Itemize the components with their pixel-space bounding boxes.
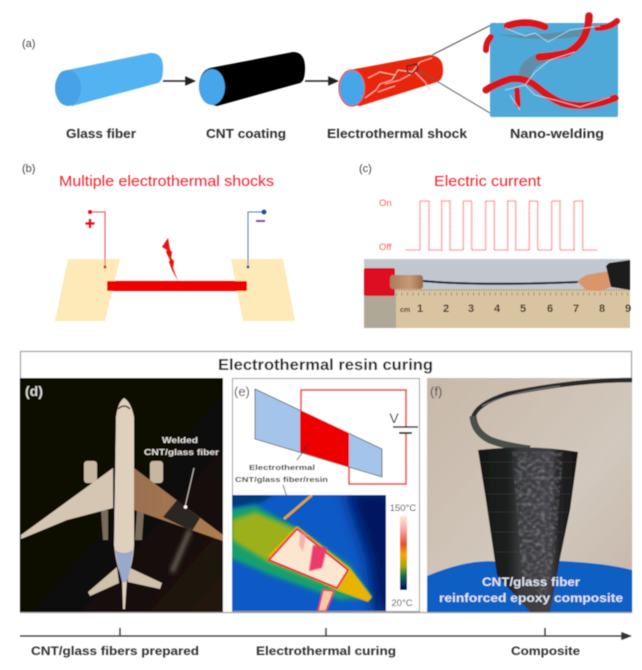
title c: Electric current	[434, 173, 542, 190]
label a: (a)	[22, 38, 35, 50]
welded fiber callout: CNT/glass fiber	[144, 447, 220, 457]
color bar maximum: 150°C	[390, 503, 416, 514]
section frame: electrothermal resin curing	[20, 352, 632, 615]
electrothermal shock cylinder	[339, 55, 443, 106]
ruler numbers: 1	[417, 303, 423, 315]
positive wire and sign	[86, 210, 106, 268]
timeline label 2: Electrothermal curing	[256, 646, 396, 658]
panel a: process schematic	[22, 16, 618, 141]
lightning icon	[162, 238, 178, 281]
ruler numbers: 9	[625, 303, 631, 315]
blue base	[427, 561, 632, 612]
panel d: airplane photo	[20, 378, 223, 612]
panel c: electric current and photo	[359, 163, 631, 328]
nano-welding detail	[486, 16, 618, 117]
timeline label 3: Composite	[511, 646, 580, 658]
welded fiber callout	[144, 435, 220, 509]
right electrode pad	[231, 259, 295, 321]
welded fiber callout: Welded	[162, 435, 198, 445]
ruler numbers: 7	[573, 303, 579, 315]
timeline	[20, 628, 630, 658]
ruler numbers: cm	[400, 307, 410, 314]
ruler numbers: 5	[520, 303, 526, 315]
pointer lines	[283, 443, 309, 536]
sheet label second line: CNT/glass fiber/resin	[235, 475, 329, 484]
composite caption line 2: reinforced epoxy composite	[439, 593, 623, 605]
label b: (b)	[22, 163, 35, 175]
off label: Off	[379, 242, 392, 253]
ruler numbers	[400, 303, 631, 315]
label e: (e)	[234, 384, 250, 399]
negative wire and sign	[246, 210, 266, 268]
ruler numbers: 4	[494, 303, 501, 315]
label c: (c)	[359, 163, 372, 175]
CNT coating label: CNT coating	[206, 127, 286, 141]
composite cone	[473, 380, 632, 612]
left electrode pad	[55, 259, 120, 321]
glass fiber cylinder	[55, 53, 163, 106]
timeline axis	[20, 633, 630, 639]
timeline ticks	[120, 628, 545, 636]
photo: wire with clips on ruler	[364, 259, 631, 328]
thermal image	[225, 488, 395, 615]
section heading: Electrothermal resin curing	[218, 357, 433, 374]
color bar minimum: 20°C	[391, 598, 413, 609]
nano-welding label: Nano-welding	[510, 127, 604, 141]
composite sheet circuit: V	[389, 410, 399, 426]
airplane	[21, 398, 223, 609]
composite sheet circuit	[255, 389, 418, 484]
pulse waveform	[406, 201, 597, 250]
panel b: electrothermal shock setup	[22, 163, 295, 321]
red sample bar	[107, 281, 247, 291]
glass fiber label: Glass fiber	[66, 127, 136, 141]
label f: (f)	[430, 384, 442, 399]
title b: Multiple electrothermal shocks	[59, 173, 274, 190]
sheet label: Electrothermal	[249, 463, 315, 472]
composite caption line 1: CNT/glass fiber	[482, 577, 581, 589]
electrothermal shock label: Electrothermal shock	[327, 127, 467, 141]
ruler numbers: 2	[443, 303, 449, 315]
zoom guide lines	[418, 23, 495, 116]
timeline label 1: CNT/glass fibers prepared	[31, 646, 199, 658]
ruler numbers: 8	[599, 303, 605, 315]
CNT coating cylinder	[199, 52, 305, 106]
label d: (d)	[25, 383, 43, 399]
ruler numbers: 3	[468, 303, 474, 315]
arrow 2	[305, 78, 337, 84]
arrow 1	[163, 78, 194, 84]
on label: On	[379, 198, 392, 209]
color bar	[400, 516, 407, 590]
panel f: composite photo	[427, 378, 632, 612]
ruler numbers: 6	[547, 303, 553, 315]
panel e: electrothermal curing	[225, 378, 420, 615]
